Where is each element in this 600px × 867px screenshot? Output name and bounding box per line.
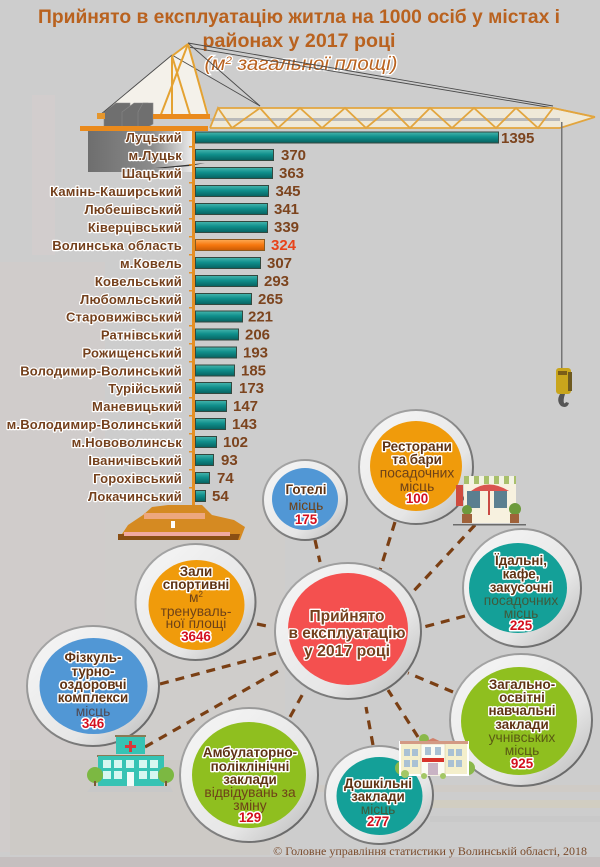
node: Загальноосвітні навчальні заклади: місць <box>505 743 539 758</box>
node: Амбулаторно-поліклінічні заклади: поліклінічні <box>211 759 289 774</box>
row: м.Володимир-Волинський: 143 <box>232 416 257 433</box>
row: Камінь-Каширський: 345 <box>276 183 301 200</box>
cables <box>100 43 553 115</box>
row: Ківерцівський: 339 <box>274 219 299 236</box>
row: Камінь-Каширський: Камінь-Каширський <box>50 184 182 199</box>
row: Ківерцівський: Ківерцівський <box>88 220 182 235</box>
node: Зали спортивні: тренуваль- <box>161 604 231 619</box>
tower struts <box>160 44 208 118</box>
node: Зали спортивні: 2 <box>199 590 204 599</box>
row: Любомльський <box>80 291 283 308</box>
row: м.Ковель <box>120 255 292 272</box>
node: Зали спортивні: ної площі <box>166 616 226 631</box>
node: Дошкільні заклади: Дошкільні <box>344 776 412 791</box>
row: Іваничівський: 93 <box>221 452 238 469</box>
row: Луцький: Луцький <box>126 130 182 145</box>
node: Прийнято в експлуатацію: Прийнято <box>310 608 385 625</box>
node: Ресторани та бари: Ресторани <box>382 439 452 454</box>
row: Волинська область <box>52 237 297 254</box>
subtitle: загальної площі) <box>232 54 398 75</box>
tower crane <box>80 43 595 540</box>
node: Їдальні, кафе, закусочні: місць <box>504 606 538 621</box>
row: Горохівський: Горохівський <box>93 471 182 486</box>
node: Загальноосвітні навчальні заклади: 925 <box>511 756 534 771</box>
node: Фізкультурно-оздоровчі комплекси: турно- <box>71 664 115 679</box>
row: Любомльський: Любомльський <box>80 292 182 307</box>
node: Амбулаторно-поліклінічні заклади: Амбулаторно- <box>203 745 297 760</box>
row: Іваничівський <box>88 452 238 469</box>
row: Турійський: Турійський <box>108 381 182 396</box>
node: Загальноосвітні навчальні заклади: навчальні <box>488 703 556 718</box>
node: Амбулаторно-поліклінічні заклади: заклади <box>223 772 277 787</box>
node: Загальноосвітні навчальні заклади: учнівських <box>489 730 555 745</box>
row: Турійський <box>108 380 264 397</box>
node: Їдальні, кафе, закусочні: Їдальні, <box>494 553 547 568</box>
node: Зали спортивні: м <box>189 590 199 605</box>
row: Ратнівський <box>101 326 270 344</box>
row: Ратнівський: 206 <box>245 326 270 344</box>
node: Фізкультурно-оздоровчі комплекси: комплекси <box>58 690 128 705</box>
row: Волинська область: Волинська область <box>52 238 182 253</box>
crane cab box <box>88 131 194 172</box>
node: Фізкультурно-оздоровчі комплекси <box>27 626 159 746</box>
node: Амбулаторно-поліклінічні заклади: зміну <box>233 798 267 813</box>
row: Ковельський <box>95 273 289 290</box>
node: Дошкільні заклади: місць <box>361 802 395 817</box>
subtitle: 2 <box>224 55 232 67</box>
row: м.Ковель: 307 <box>267 255 292 272</box>
title <box>38 6 560 75</box>
row: Ківерцівський <box>88 219 299 236</box>
node: Амбулаторно-поліклінічні заклади: 129 <box>239 810 261 825</box>
row: Любомльський: 265 <box>258 291 283 308</box>
node: Фізкультурно-оздоровчі комплекси: місць <box>76 704 110 719</box>
node: Зали спортивні: спортивні <box>163 577 229 592</box>
row: Шацький <box>122 165 304 182</box>
node: Ресторани та бари: та бари <box>392 452 442 467</box>
node: Прийнято в експлуатацію <box>275 563 421 699</box>
row: м.Нововолинськ <box>72 434 248 451</box>
row: Володимир-Волинський <box>20 362 266 380</box>
row: Камінь-Каширський <box>50 183 301 200</box>
row: Рожищенський <box>82 344 268 362</box>
node: Фізкультурно-оздоровчі комплекси: оздоровчі <box>60 677 126 692</box>
row: Рожищенський: 193 <box>243 344 268 362</box>
icon: cafe <box>453 476 526 526</box>
white A-frame <box>100 43 209 115</box>
hook block <box>556 368 572 407</box>
row: Турійський: 173 <box>239 380 264 397</box>
row: Локачинський: Локачинський <box>88 489 182 504</box>
row: Шацький: Шацький <box>122 166 182 181</box>
row: Рожищенський: Рожищенський <box>82 346 182 360</box>
node: Готелі <box>263 460 347 540</box>
node: Готелі: місць <box>289 498 323 513</box>
node: Амбулаторно-поліклінічні заклади: відвідувань за <box>204 785 296 800</box>
icon: school <box>395 734 475 779</box>
row: Волинська область: 324 <box>271 237 297 254</box>
row: Луцький: 1395 <box>501 130 534 147</box>
row: Луцький <box>126 130 534 147</box>
node: Фізкультурно-оздоровчі комплекси: Фізкуль- <box>65 650 121 665</box>
node: Готелі: Готелі <box>285 482 327 497</box>
node: Зали спортивні <box>136 544 256 660</box>
node: Загальноосвітні навчальні заклади: освітні <box>499 690 545 705</box>
row: Маневицький <box>92 398 258 415</box>
row: Старовижівський: Старовижівський <box>66 310 182 324</box>
row: Локачинський <box>88 488 229 505</box>
row: Любешівський: 341 <box>274 201 299 218</box>
title: Прийнято в експлуатацію житла на 1000 осіб у містах і <box>38 6 560 28</box>
node: Фізкультурно-оздоровчі комплекси: 346 <box>82 716 104 731</box>
icon: hospital <box>87 735 174 792</box>
node: Прийнято в експлуатацію: у 2017 році <box>304 643 390 660</box>
crane base <box>118 505 245 540</box>
bar chart <box>7 130 534 505</box>
node: Ресторани та бари <box>359 410 473 524</box>
row: Ковельський: 293 <box>264 273 289 290</box>
row: Любешівський <box>84 201 299 218</box>
row: Володимир-Волинський: 185 <box>241 362 266 380</box>
row: Горохівський: 74 <box>217 470 234 487</box>
row: м.Володимир-Волинський: м.Володимир-Волинський <box>7 417 182 432</box>
node: Дошкільні заклади: заклади <box>351 789 405 804</box>
node: Загальноосвітні навчальні заклади: заклади <box>495 717 549 732</box>
row: Локачинський: 54 <box>212 488 229 505</box>
node: Зали спортивні: 3646 <box>181 629 211 644</box>
row: Старовижівський: 221 <box>248 308 273 326</box>
row: м.Луцьк: 370 <box>281 147 306 164</box>
node: Ресторани та бари: місць <box>400 479 434 494</box>
row: Горохівський <box>93 470 234 487</box>
main beam <box>80 126 208 131</box>
row: Ковельський: Ковельський <box>95 274 182 289</box>
title: районах у 2017 році <box>202 30 396 52</box>
row: м.Луцьк <box>129 147 306 164</box>
row: м.Нововолинськ: 102 <box>223 434 248 451</box>
node: Загальноосвітні навчальні заклади <box>450 654 592 786</box>
node: Їдальні, кафе, закусочні: закусочні <box>490 580 552 595</box>
row: Любешівський: Любешівський <box>84 202 182 217</box>
row: Іваничівський: Іваничівський <box>88 453 182 468</box>
row: м.Нововолинськ: м.Нововолинськ <box>72 435 182 450</box>
footer credit: © Головне управління статистики у Волинській області, 2018 <box>273 844 587 858</box>
node: Дошкільні заклади: 277 <box>367 814 389 829</box>
node: Ресторани та бари: посадочних <box>380 466 454 480</box>
row: Володимир-Волинський: Володимир-Волинський <box>20 364 182 378</box>
node: Їдальні, кафе, закусочні <box>463 529 581 647</box>
node: Їдальні, кафе, закусочні: посадочних <box>484 593 558 608</box>
mast <box>192 131 195 514</box>
jib truss <box>210 108 595 128</box>
node: Амбулаторно-поліклінічні заклади <box>180 708 318 842</box>
node: Ресторани та бари: 100 <box>406 491 428 506</box>
node: Дошкільні заклади <box>325 746 433 844</box>
row: Маневицький: Маневицький <box>92 399 182 414</box>
node: Їдальні, кафе, закусочні: кафе, <box>503 566 539 582</box>
row: м.Ковель: м.Ковель <box>120 256 182 271</box>
row: Шацький: 363 <box>279 165 304 182</box>
subtitle: (м <box>204 54 224 75</box>
node: Загальноосвітні навчальні заклади: Загально- <box>489 677 555 692</box>
hook cable <box>561 122 562 370</box>
row: Ратнівський: Ратнівський <box>101 328 182 342</box>
node: Їдальні, кафе, закусочні: 225 <box>510 618 533 633</box>
node: Прийнято в експлуатацію: в експлуатацію <box>288 625 406 642</box>
dashed connectors <box>145 522 475 747</box>
counterweights <box>104 103 153 127</box>
row: Маневицький: 147 <box>233 398 258 415</box>
row: м.Луцьк: м.Луцьк <box>129 148 182 163</box>
row: Старовижівський <box>66 308 273 326</box>
row: м.Володимир-Волинський <box>7 416 257 433</box>
node: Зали спортивні: Зали <box>180 564 212 579</box>
node: Готелі: 175 <box>295 512 318 527</box>
